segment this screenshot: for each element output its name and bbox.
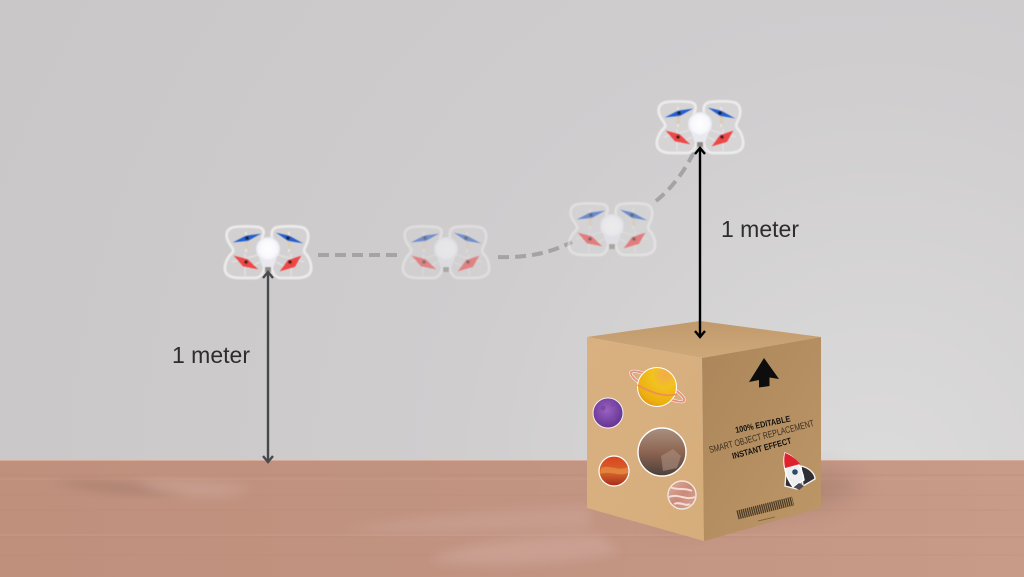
box top face bbox=[587, 321, 821, 358]
icon: rocket bbox=[784, 453, 815, 490]
background wall bbox=[0, 0, 1024, 461]
planet: purple bbox=[593, 398, 623, 428]
box text: INSTANT EFFECT bbox=[731, 435, 793, 461]
drone: top position bbox=[657, 101, 743, 153]
box text: 100% EDITABLE bbox=[734, 413, 791, 435]
box text bbox=[708, 413, 815, 461]
planet: ringed gold bbox=[628, 367, 687, 406]
dashed flight path bbox=[318, 152, 694, 257]
label: right 1 meter: 1 meter bbox=[721, 216, 799, 242]
drone: start position bbox=[225, 226, 311, 278]
planet: brown bbox=[638, 428, 686, 476]
drone: ghost position 2 bbox=[403, 226, 489, 278]
label: left 1 meter: 1 meter bbox=[172, 342, 250, 368]
planet: red bbox=[599, 456, 629, 486]
wooden table bbox=[0, 460, 1024, 577]
barcode bbox=[738, 501, 793, 521]
planet: pink swirl bbox=[668, 481, 696, 509]
box left face bbox=[587, 337, 704, 541]
arrow: left 1 meter height bbox=[263, 272, 273, 462]
icon: up arrow bbox=[749, 358, 779, 388]
box text: SMART OBJECT REPLACEMENT bbox=[708, 417, 815, 455]
drone: ghost position 3 bbox=[569, 203, 655, 255]
arrow: box to top drone 1 meter bbox=[695, 148, 705, 337]
shipping box bbox=[587, 321, 821, 541]
shipping box shadow bbox=[640, 470, 870, 530]
box right face bbox=[702, 337, 821, 541]
